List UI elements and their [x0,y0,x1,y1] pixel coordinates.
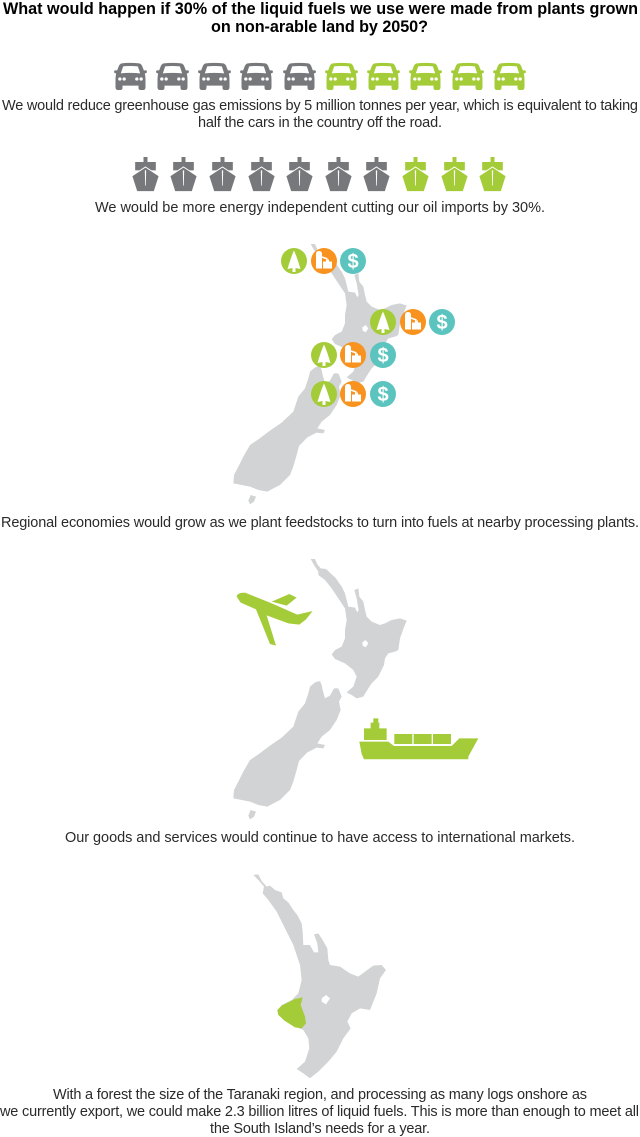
text: regional economies: Regional economies would grow as we plant feedstocks to turn into fuels at nearby processing plants. [1,515,639,531]
text: greenhouse gas emissions: half the cars in the country off the road. [198,115,442,131]
icon row: upper South Island [311,381,396,407]
car icon row: half grey, half green [114,63,526,90]
icon: plane [237,593,313,646]
map: New Zealand islands [233,244,407,504]
title: What would happen if 30% of the liquid fuels we use were made from plants grown [3,0,638,18]
text: Taranaki forest: With a forest the size of the Taranaki region, and processing as many logs onshore as [53,1087,587,1103]
text: Taranaki forest [0,1087,639,1137]
text: international markets: Our goods and services would continue to have access to international markets. [65,830,575,846]
icon row: lower North Island [311,342,396,368]
text: greenhouse gas emissions [2,98,638,131]
lake Taupo [322,995,330,1004]
map: New Zealand with plane and ship [233,559,478,819]
text: Taranaki forest: the South Island’s needs for a year. [210,1121,430,1137]
icon: container ship [359,718,478,759]
map: New Zealand islands [233,559,407,819]
text: greenhouse gas emissions: We would reduce greenhouse gas emissions by 5 million tonnes per year, which is equivalent to taking [2,98,638,114]
icon row: Northland [281,248,366,274]
icon row: Gisborne [370,309,455,335]
text: energy independence: We would be more energy independent cutting our oil imports by 30%. [95,200,545,216]
map: North Island with Taranaki highlighted [253,874,386,1078]
map: North Island [253,874,386,1078]
map: New Zealand with regional icons [233,244,455,504]
title [3,0,638,36]
Taranaki region [277,997,306,1028]
title: on non-arable land by 2050? [211,18,428,36]
ship icon row: 70% grey, 30% green [132,157,506,192]
text: Taranaki forest: we currently export, we could make 2.3 billion litres of liquid fuels. This is more than enough to meet all [0,1104,639,1120]
